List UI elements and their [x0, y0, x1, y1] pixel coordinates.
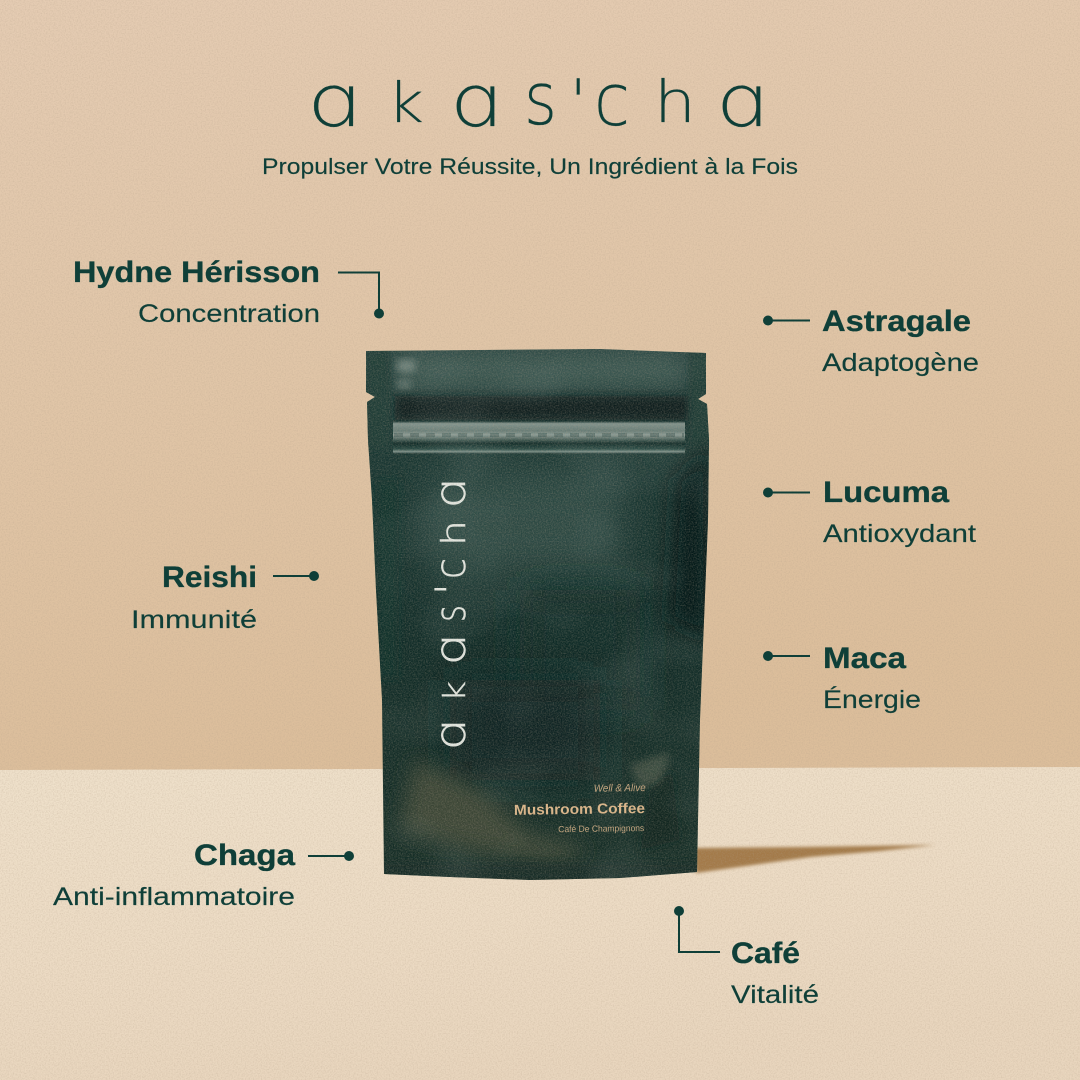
brand logo: ' [570, 67, 586, 137]
pouch vertical logo: s [426, 605, 475, 622]
callout: Reishi: Reishi [162, 561, 257, 594]
callout: Maca: Maca [823, 642, 906, 675]
pouch product text: Mushroom Coffee [514, 801, 645, 819]
brand logo: h [654, 68, 696, 136]
tagline: Propulser Votre Réussite, Un Ingrédient à la Fois [262, 154, 798, 179]
brand logo: s [524, 57, 557, 141]
callout: Astragale: Adaptogène [822, 349, 979, 377]
background floor [0, 767, 1080, 1080]
callout: Café [674, 906, 819, 1009]
callout: Lucuma: Lucuma [823, 476, 949, 509]
callout: Chaga [53, 839, 354, 911]
pouch vertical logo: ɑ [426, 479, 475, 510]
brand logo: ɑ [713, 59, 767, 143]
callout: Chaga: Anti-inflammatoire [53, 883, 295, 911]
pouch product text: Café De Champignons [558, 823, 645, 834]
pouch product text [514, 782, 646, 835]
callout: Café: Vitalité [731, 981, 819, 1009]
pouch vertical logo: ' [426, 583, 475, 595]
pouch vertical logo: ɑ [426, 635, 475, 667]
callout: Reishi: Immunité [131, 606, 257, 634]
bag cast shadow [695, 845, 935, 873]
callout: Lucuma: Antioxydant [823, 520, 976, 548]
background wall [0, 0, 1080, 770]
callout: Lucuma [763, 476, 976, 548]
pouch vertical logo: k [438, 681, 473, 702]
product pouch [360, 345, 715, 885]
callout: Maca: Énergie [823, 685, 921, 714]
brand logo: c [594, 58, 630, 142]
brand logo: ɑ [304, 59, 360, 143]
callout: Hydne Hérisson [73, 256, 384, 328]
pouch shading [360, 345, 715, 885]
callout: Hydne Hérisson: Concentration [138, 300, 320, 328]
callout: Maca [763, 642, 921, 714]
pouch vertical logo: ɑ [426, 720, 475, 752]
brand logo: ɑ [447, 59, 501, 143]
brand logo: k [387, 71, 424, 135]
pouch body [366, 349, 709, 880]
pouch vertical logo: c [426, 558, 475, 579]
callout: Astragale [763, 305, 979, 377]
callout: Hydne Hérisson: Hydne Hérisson [73, 256, 320, 289]
callout: Café: Café [731, 937, 800, 970]
callout: Astragale: Astragale [822, 305, 971, 338]
pouch vertical logo: h [434, 520, 473, 546]
callout: Reishi [131, 561, 319, 634]
callout: Chaga: Chaga [194, 839, 295, 872]
pouch product text: Well & Alive [594, 782, 646, 795]
